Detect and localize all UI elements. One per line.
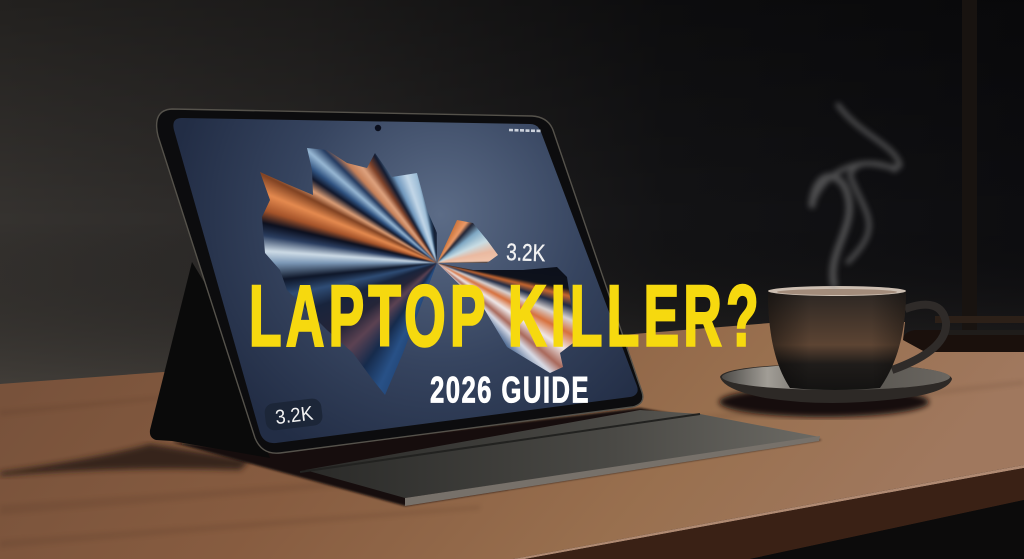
tablet screen (173, 118, 638, 443)
tablet stand (150, 262, 270, 458)
tablet (157, 109, 643, 453)
keyboard cover (172, 408, 822, 506)
status bar icons (509, 130, 541, 131)
cup handle (892, 305, 946, 370)
table shadow of tablet (0, 444, 250, 476)
coffee saucer shadow (719, 387, 929, 417)
coffee surface (777, 289, 897, 295)
fan artwork on screen (260, 148, 573, 395)
badge: 3.2K: 3.2K (274, 403, 315, 429)
badge: 3.2K (264, 398, 323, 431)
background wall (0, 0, 1024, 400)
steam (812, 105, 900, 285)
shelf lamp post and base (903, 0, 1024, 352)
saucer top (722, 364, 950, 390)
cup rim (768, 286, 906, 296)
cup body (768, 290, 906, 390)
coffee cup and saucer (720, 286, 952, 403)
tablet body (157, 109, 643, 453)
camera (375, 125, 381, 131)
wooden table (0, 322, 1024, 559)
subtitle: 2026 GUIDE (430, 370, 590, 410)
saucer (720, 365, 952, 403)
screen label: 3.2K: 3.2K (506, 239, 546, 267)
cup side shading (768, 290, 906, 390)
